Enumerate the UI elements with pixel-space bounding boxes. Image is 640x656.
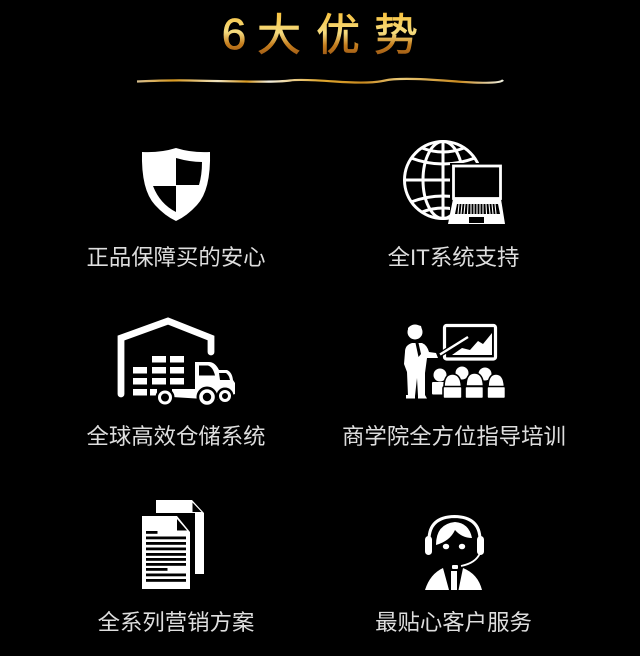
icon: presenter at board <box>404 324 506 398</box>
title: 势 <box>374 11 418 60</box>
icon: customer service agent <box>425 516 484 590</box>
title: 优 <box>316 11 360 60</box>
icon: globe and laptop <box>404 141 507 227</box>
icon: warehouse and truck <box>121 321 235 405</box>
label: genuine: 正品保障买的安心 <box>86 245 266 270</box>
icon: documents <box>142 500 204 589</box>
title <box>222 10 418 60</box>
label: marketing plans: 全系列营销方案 <box>98 610 254 635</box>
title: 大 <box>257 11 301 60</box>
label: academy: 商学院全方位指导培训 <box>342 424 566 449</box>
label: customer service: 最贴心客户服务 <box>375 610 532 635</box>
gold divider line <box>137 79 503 83</box>
label: warehouse: 全球高效仓储系统 <box>86 424 266 449</box>
label: IT system: 全IT系统支持 <box>388 245 519 270</box>
title: 6 <box>222 10 246 59</box>
icon: shield <box>142 148 210 221</box>
